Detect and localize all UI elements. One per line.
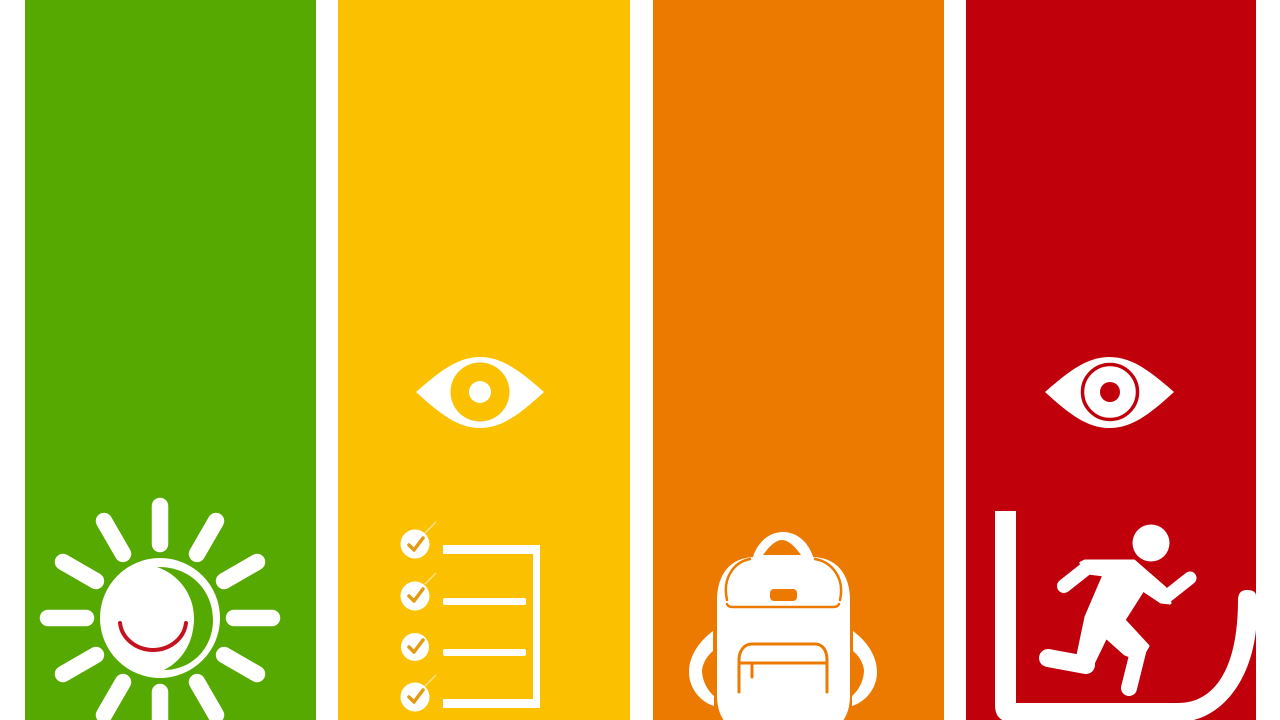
sun crescent — [157, 567, 213, 670]
runner forearms and lower legs — [1048, 567, 1190, 688]
backpack flap lines — [726, 559, 841, 607]
eye outline — [1045, 357, 1174, 428]
panel: green — [25, 0, 316, 720]
eye iris — [450, 362, 510, 422]
backpack zip pull — [770, 589, 797, 601]
panel: yellow — [338, 0, 630, 720]
checklist frame and lines — [443, 545, 540, 708]
panel background: yellow — [338, 0, 630, 720]
backpack handle opening — [763, 540, 801, 555]
panel: orange — [653, 0, 944, 720]
panel: red — [966, 0, 1256, 720]
checklist check marks — [409, 538, 423, 702]
icon: backpack — [689, 532, 877, 720]
eye pupil — [469, 381, 491, 403]
sun disc — [100, 558, 220, 678]
icon: eye — [416, 357, 544, 428]
sun smile — [120, 623, 186, 650]
checklist faint tick tails — [425, 522, 436, 686]
runner torso and upper limbs — [1078, 561, 1170, 670]
icon: eye with ring — [1045, 357, 1174, 428]
backpack body — [717, 557, 850, 720]
panel background: green — [25, 0, 316, 720]
eye outline — [416, 357, 544, 428]
backpack handle — [752, 532, 814, 560]
panel background: red — [966, 0, 1256, 720]
sun rays — [48, 506, 272, 720]
backpack right strap — [852, 631, 877, 706]
eye ring — [1082, 364, 1138, 420]
eye pupil — [1100, 382, 1120, 402]
runner head — [1132, 524, 1170, 562]
backpack left strap — [689, 631, 714, 706]
icon: running figure — [1048, 524, 1190, 688]
icon: exit track — [995, 511, 1256, 720]
backpack front pocket — [739, 644, 827, 692]
checklist tick circles — [400, 530, 430, 712]
panel background: orange — [653, 0, 944, 720]
icon: checklist — [400, 522, 540, 712]
icon: smiling sun — [48, 506, 272, 720]
